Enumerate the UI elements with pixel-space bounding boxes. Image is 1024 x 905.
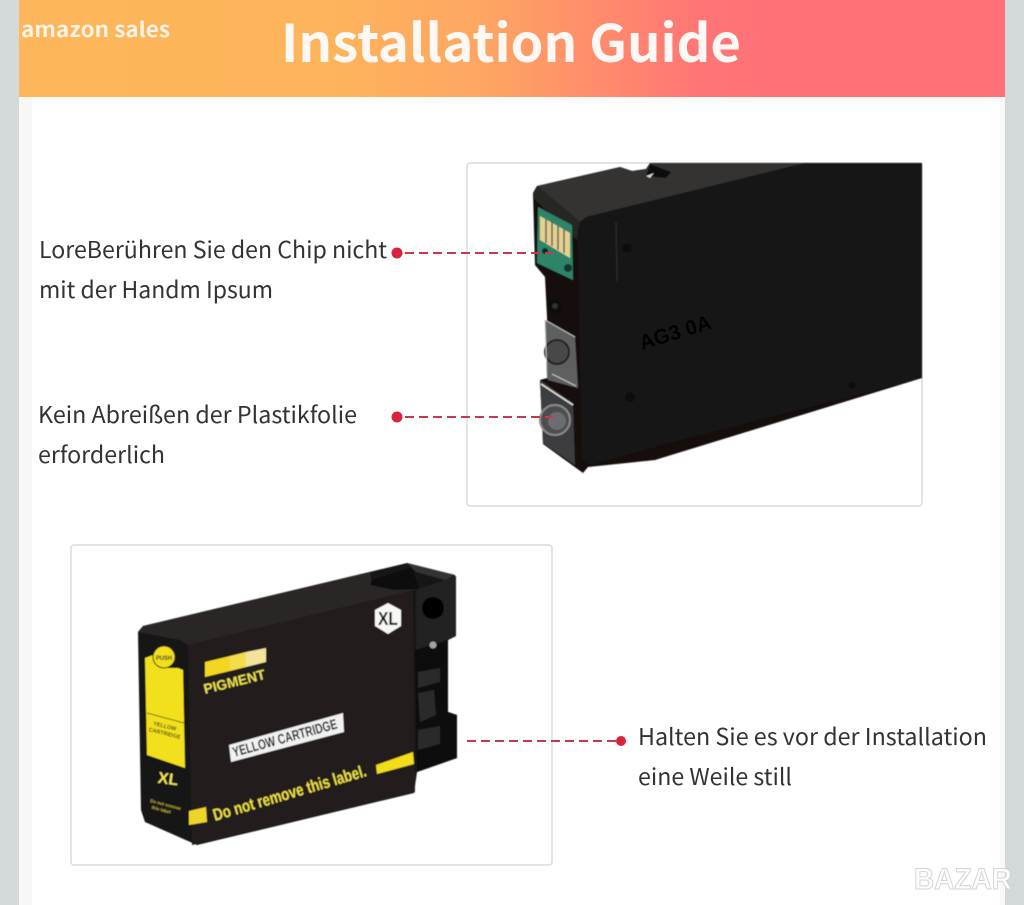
label text: Halten Sie es vor der Installation <box>638 718 987 752</box>
image: yellow cartridge: YELLOW <box>153 721 178 733</box>
panel: yellow cartridge photo <box>71 545 552 865</box>
pointer arrow <box>467 736 626 746</box>
label text: Kein Abreißen der Plastikfolie <box>38 396 357 430</box>
watermark: amazon sales: amazon sales <box>21 14 170 44</box>
XL badge <box>375 603 401 634</box>
label text: LoreBerühren Sie den Chip nicht <box>39 231 387 265</box>
image: yellow cartridge: CARTRIDGE <box>148 727 181 741</box>
image: yellow cartridge: PIGMENT <box>202 666 267 697</box>
pigment swatch <box>205 648 266 677</box>
pointer arrow <box>392 412 553 422</box>
upper sealed port <box>545 320 578 388</box>
yellow cartridge label <box>229 713 344 762</box>
header banner <box>19 0 1005 97</box>
lower sealed port <box>540 380 575 465</box>
image: yellow cartridge: XL <box>157 770 180 790</box>
warning text: Do not remove this label. <box>211 761 369 825</box>
image: yellow cartridge: this label <box>151 805 171 815</box>
callout: hold still before installation <box>467 718 987 792</box>
yellow cartridge label: YELLOW CARTRIDGE <box>231 716 339 760</box>
pointer arrow <box>392 248 553 258</box>
yellow side label <box>145 655 185 768</box>
panel: rear cartridge photo <box>467 163 922 506</box>
callout: do not touch the chip <box>39 231 553 305</box>
watermark: BAZAR: BAZAR <box>914 863 1012 896</box>
label text: eine Weile still <box>638 758 792 792</box>
callout: plastic film <box>38 396 553 470</box>
embossed model text: AG3 0A <box>637 311 714 355</box>
image: yellow cartridge <box>138 563 457 845</box>
label text: erforderlich <box>38 436 165 470</box>
chip <box>537 207 573 280</box>
title: Installation Guide <box>281 2 741 77</box>
image: yellow cartridge: PUSH <box>156 656 172 662</box>
image: yellow cartridge: Do not remove <box>150 798 182 811</box>
label text: mit der Handm Ipsum <box>39 271 273 305</box>
XL badge: XL <box>378 609 398 629</box>
image: rear of cartridge <box>533 163 922 473</box>
window details <box>418 668 440 750</box>
